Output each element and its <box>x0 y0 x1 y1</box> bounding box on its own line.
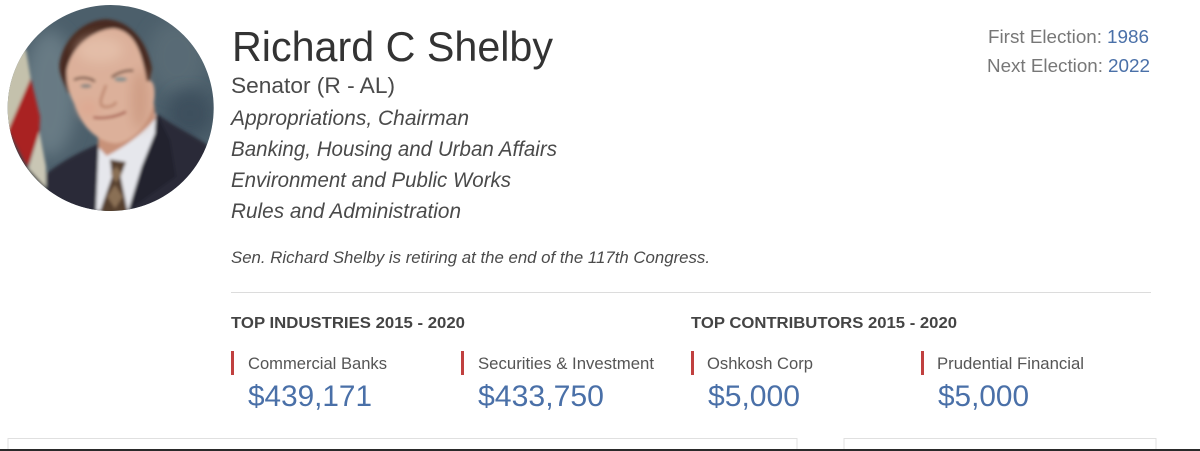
lower right card <box>844 438 1156 451</box>
stat: prudential financial <box>921 351 1084 413</box>
stat: securities and investment: Securities & Investment <box>478 354 654 373</box>
stat: oshkosh corp: $5,000 <box>708 380 800 413</box>
retirement note: Sen. Richard Shelby is retiring at the end of the 117th Congress. <box>231 248 710 267</box>
portrait photo <box>8 5 214 211</box>
election dates: 2022 <box>1108 56 1150 76</box>
name heading: Richard C Shelby <box>232 23 553 70</box>
neck <box>97 103 155 156</box>
committees <box>229 107 557 223</box>
committees: Environment and Public Works <box>231 169 511 192</box>
lower left card <box>8 438 797 451</box>
suit <box>46 114 208 211</box>
stat: commercial banks <box>231 351 387 413</box>
role: Senator (R - AL) <box>231 73 395 98</box>
shirt <box>96 113 156 211</box>
section heading: top contributors: TOP CONTRIBUTORS 2015 - 2020 <box>691 315 957 332</box>
face <box>67 28 155 143</box>
committees: Rules and Administration <box>231 200 461 223</box>
bottom edge <box>0 449 1200 451</box>
committees: Banking, Housing and Urban Affairs <box>231 138 557 161</box>
brows, eyes <box>74 78 95 82</box>
flag <box>8 48 33 132</box>
election dates <box>987 27 1150 76</box>
stat: securities and investment <box>461 351 654 413</box>
hair <box>59 19 152 93</box>
stat: prudential financial: $5,000 <box>938 380 1029 413</box>
section heading: top industries: TOP INDUSTRIES 2015 - 2020 <box>231 315 465 332</box>
mouth <box>93 112 126 118</box>
election dates: 1986 <box>1107 27 1149 47</box>
election dates: Next Election: <box>987 56 1103 76</box>
stat: oshkosh corp <box>691 351 813 413</box>
stat: commercial banks: $439,171 <box>248 380 372 413</box>
stat: securities and investment: $433,750 <box>478 380 604 413</box>
stat: oshkosh corp: Oshkosh Corp <box>707 354 813 373</box>
nose and shading <box>101 85 116 107</box>
election dates: First Election: <box>988 27 1102 47</box>
committees: Appropriations, Chairman <box>229 107 469 130</box>
tie <box>99 159 128 213</box>
stat: commercial banks: Commercial Banks <box>248 354 387 373</box>
stat: prudential financial: Prudential Financial <box>937 354 1084 373</box>
